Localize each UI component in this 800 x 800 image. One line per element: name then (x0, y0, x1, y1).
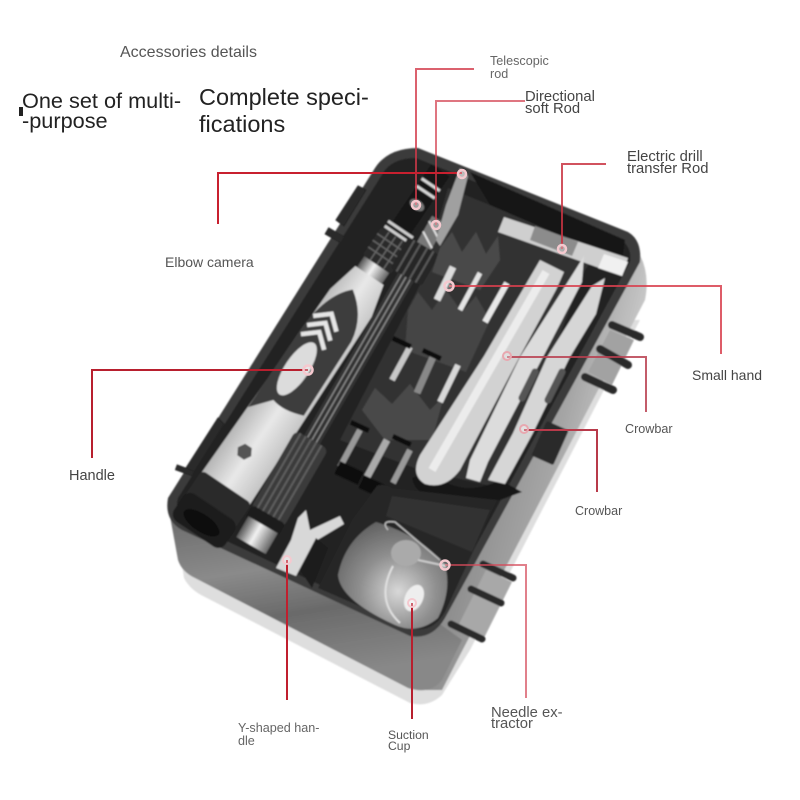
callout: Y-shaped handle (283, 556, 291, 700)
upper tray floor (340, 188, 600, 488)
pale fin tool (436, 168, 468, 246)
case interior (177, 158, 630, 627)
label: telescopic rod: rod (490, 67, 508, 81)
label: electric drill transfer rod: Electric drill (627, 149, 703, 165)
title: accessories details: Accessories details (120, 44, 257, 61)
main screwdriver handle (169, 153, 466, 551)
case front wall (168, 505, 462, 690)
tray teeth and bits (334, 232, 507, 499)
heading: complete specifications: fications (199, 111, 285, 137)
callout: needle extractor (440, 560, 526, 698)
label: suction cup: Cup (388, 739, 411, 753)
left latches (176, 186, 366, 476)
label: crowbar upper: Crowbar (625, 422, 673, 436)
heading: one set of multi-purpose (19, 88, 181, 133)
back wall band (470, 172, 625, 262)
handle body (200, 259, 394, 507)
hex socket (234, 441, 255, 462)
label: needle extractor: Needle ex- (491, 705, 563, 721)
label: elbow camera: Elbow camera (165, 254, 254, 270)
toolbox photo (167, 148, 647, 704)
label: telescopic rod: Telescopic (490, 54, 549, 68)
label: Y-shaped handle: Y-shaped han- (238, 721, 319, 735)
label: small hand: Small hand (692, 367, 762, 383)
second rod with ribbed grip (235, 210, 455, 555)
label: suction cup: Suction (388, 728, 429, 742)
suction cup compartment (318, 485, 497, 629)
callout: directional soft rod (432, 101, 525, 229)
label: Y-shaped handle: dle (238, 734, 255, 748)
callout: electric drill transfer rod (558, 164, 606, 253)
rubber grip (248, 278, 378, 436)
callout: crowbar lower (520, 425, 597, 492)
Y-shaped handle piece (276, 510, 344, 588)
case right wall (425, 255, 647, 690)
suction cup (338, 522, 447, 629)
label: handle: Handle (69, 468, 115, 484)
crowbars (412, 256, 605, 500)
callout: telescopic rod (412, 69, 474, 209)
heading: complete specifications: Complete speci- (199, 84, 369, 110)
callout: small hand (444, 282, 721, 354)
heading: one set of multi-purpose: One set of multi- (22, 88, 181, 113)
label: needle extractor: tractor (491, 716, 533, 732)
label: directional soft rod: soft Rod (525, 101, 580, 117)
callout: suction cup (408, 599, 416, 719)
label: directional soft rod: Directional (525, 89, 595, 105)
callout: crowbar upper (503, 352, 646, 412)
label: crowbar lower: Crowbar (575, 504, 622, 518)
chevrons (301, 306, 343, 350)
heading: one set of multi-purpose: -purpose (22, 108, 108, 133)
callout: elbow camera (218, 170, 466, 224)
case rim (167, 148, 640, 637)
label: electric drill transfer rod: transfer Rod (627, 161, 708, 177)
callout: handle (92, 366, 312, 458)
electric drill transfer rod (498, 217, 628, 276)
case base shadow (180, 320, 640, 704)
right latches (451, 325, 640, 639)
